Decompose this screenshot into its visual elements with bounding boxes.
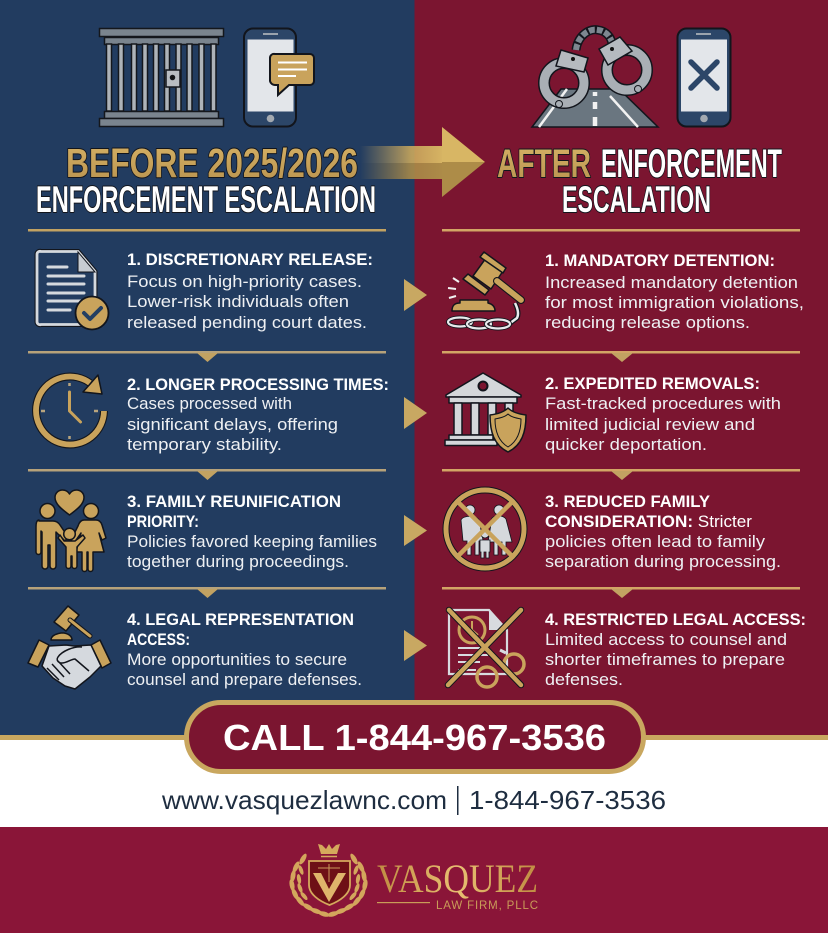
icon: jail cell [100, 28, 224, 126]
text: family reunification priority: PRIORITY: [127, 513, 199, 531]
text: family reunification priority [127, 493, 377, 571]
text: family reunification priority: Policies favored keeping families [127, 533, 377, 551]
heading: before [36, 140, 376, 220]
text: longer processing times: temporary stability. [127, 436, 282, 454]
icon: courthouse with shield [445, 373, 526, 452]
icon: phone with message [244, 28, 314, 126]
text: longer processing times: Cases processed with [127, 395, 292, 413]
call to action button: CALL 1-844-967-3536 [223, 717, 606, 758]
text: reduced family consideration: CONSIDERATION: Stricter [545, 513, 753, 531]
icon: phone with X [678, 28, 730, 126]
text: reduced family consideration [545, 493, 781, 571]
contact line: www.vasquezlawnc.com [161, 785, 447, 815]
heading: after: AFTER [497, 142, 591, 186]
icon: handcuffs on road [532, 30, 658, 127]
panel: after (crimson) background [414, 0, 828, 736]
text: family reunification priority: together during proceedings. [127, 553, 349, 571]
text: legal representation access: counsel and prepare defenses. [127, 671, 362, 689]
icon: gavel and chain [448, 252, 521, 328]
text: reduced family consideration: separation during processing. [545, 553, 781, 571]
arrow: before to after [360, 127, 485, 197]
text: restricted legal access: Limited access to counsel and [545, 631, 787, 649]
text: mandatory detention: 1. MANDATORY DETENTION: [545, 252, 775, 270]
text: mandatory detention: reducing release options. [545, 314, 750, 332]
logo: Vasquez Law Firm [289, 844, 538, 918]
heading: before: BEFORE 2025/2026 [66, 140, 358, 186]
text: reduced family consideration: 3. REDUCED FAMILY [545, 493, 710, 511]
markers: down arrows left [197, 353, 218, 598]
heading: after: ESCALATION [562, 179, 711, 220]
text: longer processing times: significant delays, offering [127, 416, 338, 434]
text: restricted legal access: shorter timeframes to prepare [545, 651, 785, 669]
icon: document with check [37, 251, 109, 330]
call to action button [186, 702, 644, 772]
text: discretionary release: Lower-risk individuals often [127, 293, 349, 311]
heading: before: ENFORCEMENT ESCALATION [36, 179, 376, 220]
text: reduced family consideration: policies often lead to family [545, 533, 766, 551]
text: mandatory detention [545, 252, 804, 332]
icon: clock with arrow [36, 375, 104, 444]
text: restricted legal access [545, 611, 806, 689]
text: restricted legal access: defenses. [545, 671, 623, 689]
text: restricted legal access: 4. RESTRICTED LEGAL ACCESS: [545, 611, 806, 629]
text: legal representation access [127, 611, 362, 689]
markers: down arrows right [611, 353, 633, 598]
text: discretionary release: 1. DISCRETIONARY RELEASE: [127, 251, 373, 269]
text: mandatory detention: for most immigration violations, [545, 294, 804, 312]
icon: crossed out family [446, 490, 524, 568]
text: legal representation access: ACCESS: [127, 631, 190, 649]
text: discretionary release: Focus on high-priority cases. [127, 273, 362, 291]
text: expedited removals [545, 375, 781, 454]
text: family reunification priority: 3. FAMILY REUNIFICATION [127, 493, 341, 511]
text: discretionary release [127, 251, 373, 332]
text: legal representation access: More opportunities to secure [127, 651, 347, 669]
contact band [0, 735, 828, 827]
text: expedited removals: 2. EXPEDITED REMOVALS: [545, 375, 760, 393]
footer background [0, 827, 828, 933]
text: longer processing times: 2. LONGER PROCESSING TIMES: [127, 376, 389, 394]
text: expedited removals: Fast-tracked procedures with [545, 395, 781, 413]
logo: Vasquez Law Firm: LAW FIRM, PLLC [436, 900, 538, 912]
markers: center arrows [404, 279, 427, 661]
logo: Vasquez Law Firm: VASQUEZ [377, 856, 538, 901]
text: longer processing times [127, 376, 389, 454]
text: discretionary release: released pending court dates. [127, 314, 367, 332]
icon: family with heart [36, 490, 106, 572]
contact line: 1-844-967-3536 [469, 785, 666, 815]
gold band edge [0, 735, 828, 740]
heading: after [497, 142, 782, 220]
panel: before (navy) background [0, 0, 414, 736]
contact line [161, 785, 666, 815]
icon: gavel and handshake [28, 606, 111, 689]
text: expedited removals: quicker deportation. [545, 436, 707, 454]
text: mandatory detention: Increased mandatory detention [545, 274, 798, 292]
text: expedited removals: limited judicial review and [545, 416, 755, 434]
text: legal representation access: 4. LEGAL REPRESENTATION [127, 611, 354, 629]
icon: crossed out legal papers [448, 610, 524, 687]
